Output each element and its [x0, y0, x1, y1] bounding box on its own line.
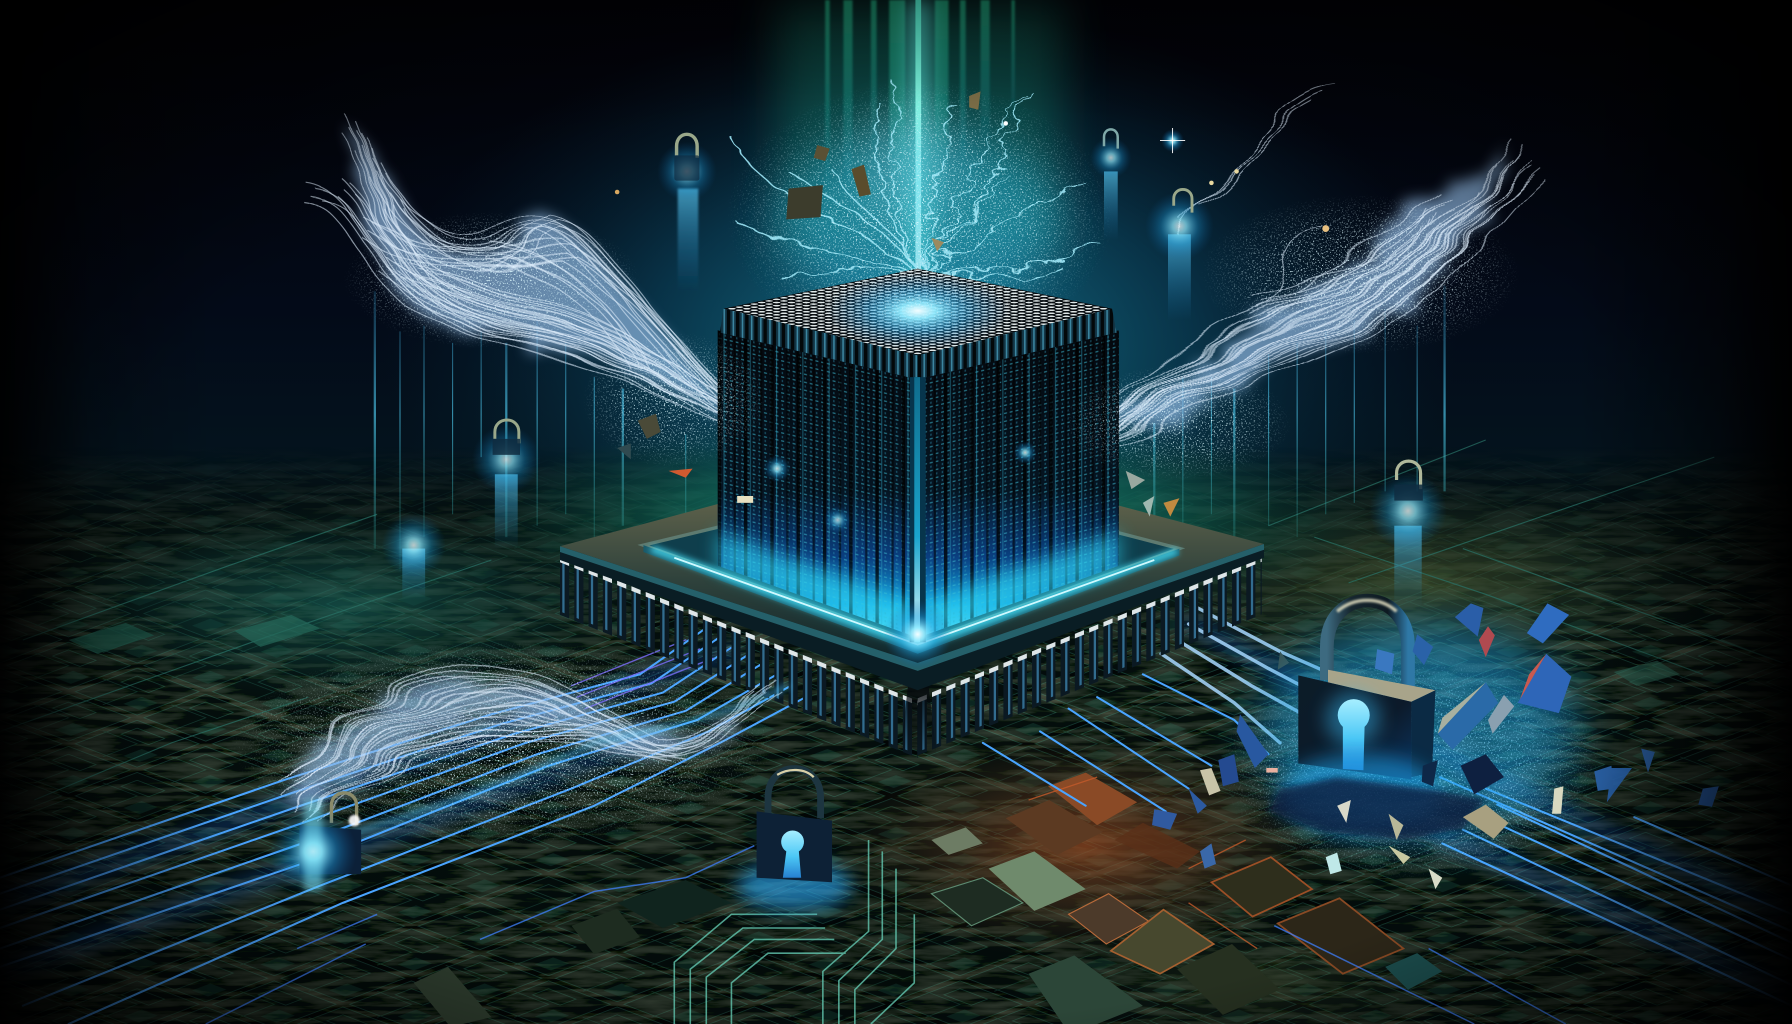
- cube right face: [918, 330, 1119, 638]
- small padlock: left: [472, 420, 541, 549]
- cube top slab: [720, 269, 1117, 379]
- blue data lines, right: [983, 608, 1792, 1006]
- light beam with green streaks: [777, 0, 1063, 320]
- energy burst above the cube: [731, 80, 1097, 314]
- wisp: lower left: [280, 663, 789, 846]
- pins of the processor, right side: [899, 560, 1262, 759]
- padlock: lower centre: [737, 769, 851, 911]
- small padlock: top centre right: [1090, 129, 1131, 240]
- cube sparkles: [763, 441, 1037, 534]
- big padlock with shattered fragments: [1152, 600, 1719, 889]
- blue data lines, left: [0, 626, 806, 1024]
- data cube: [651, 269, 1177, 669]
- pins of the processor, left side: [560, 560, 918, 729]
- fragment glow: [1257, 623, 1577, 840]
- wisp: upper left: [302, 115, 749, 429]
- shattered fragments: [1152, 603, 1719, 889]
- circuit board traces and tiles: [0, 440, 1783, 1024]
- small padlock: right: [1369, 461, 1447, 606]
- cube left face: [718, 330, 918, 638]
- cube base glow: [651, 531, 1177, 646]
- stars and flying fragments: [615, 91, 1329, 670]
- padlock body: [1298, 670, 1435, 779]
- processor platform: [560, 451, 1264, 690]
- floor: [0, 411, 1792, 1024]
- wisp: upper right: [1062, 86, 1543, 451]
- small padlock: upper right: [1145, 189, 1214, 320]
- padlock shackle: [1327, 600, 1408, 697]
- small padlock: top left: [657, 134, 717, 291]
- hanging data lines, left and right: [375, 286, 1445, 571]
- padlock: lower left, dissolving: [270, 793, 361, 895]
- spray of particles: [236, 85, 1600, 877]
- glow burst: far left: [382, 513, 446, 600]
- cube front edge: [883, 377, 952, 669]
- padlock keyhole: [1326, 691, 1381, 770]
